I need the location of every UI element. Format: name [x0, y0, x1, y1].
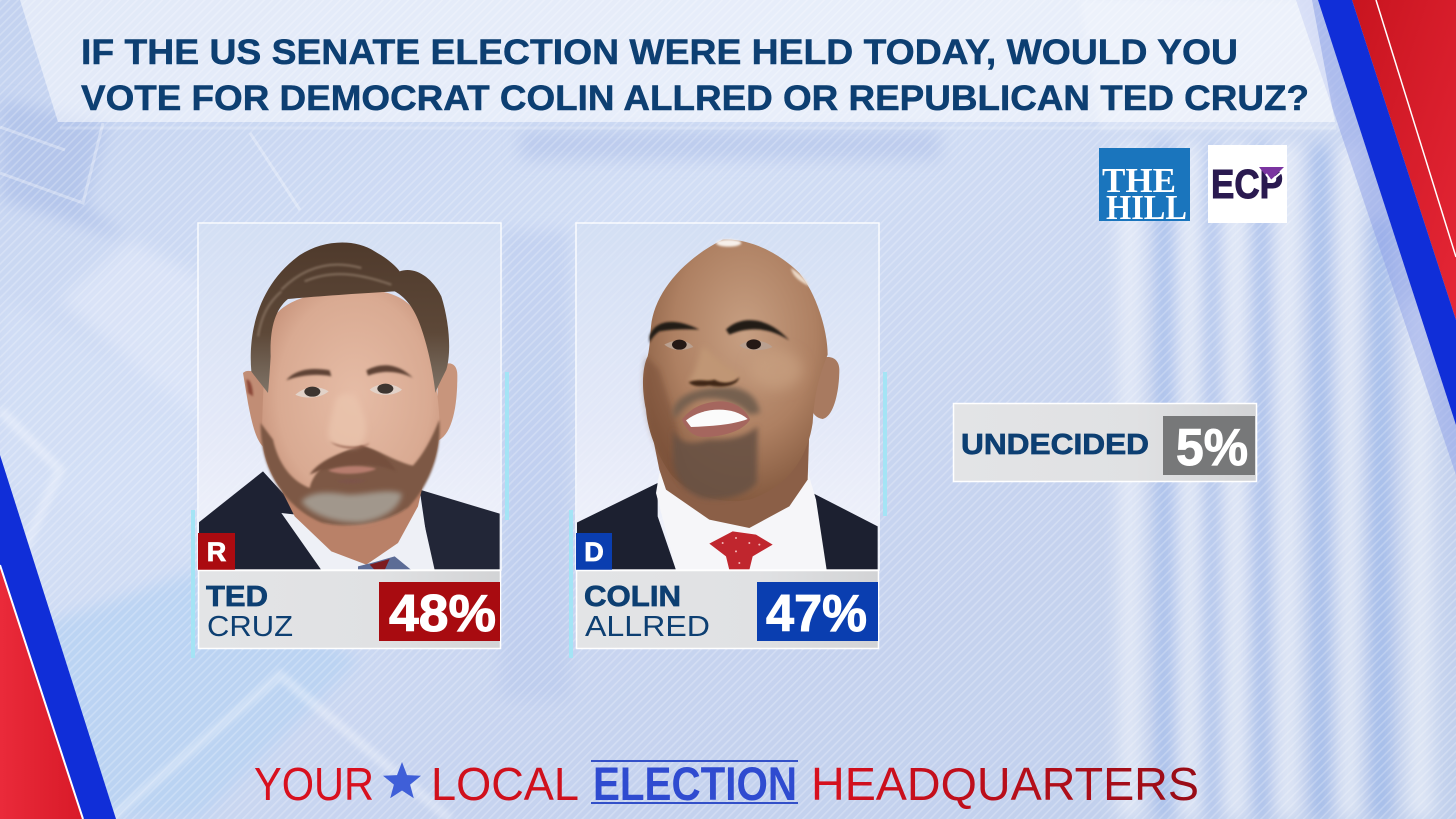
logo: ECP: ECP	[1211, 161, 1283, 207]
tagline: ELECTION	[593, 757, 797, 810]
tagline: LOCAL	[431, 758, 579, 810]
percentage 48%: 48%	[389, 585, 496, 643]
name strip: CRUZ	[207, 611, 293, 643]
tagline: YOUR	[254, 758, 374, 810]
name strip: TED	[206, 581, 268, 613]
tagline	[254, 757, 1199, 810]
bottom-left red and blue corner	[0, 455, 116, 819]
accent lines	[569, 372, 887, 658]
candidate card: Ted Cruz	[191, 223, 509, 658]
accent lines	[191, 372, 509, 658]
logo: ECP	[1208, 145, 1287, 223]
party badge D: D	[584, 537, 604, 567]
undecided label: UNDECIDED	[961, 429, 1149, 461]
party badge R: R	[207, 537, 226, 567]
top-right red and blue corner	[1296, 0, 1456, 475]
title panel	[20, 0, 1335, 122]
candidate card: Colin Allred	[569, 223, 887, 658]
portrait: Colin Allred	[576, 223, 879, 570]
percentage 5%: 5%	[1176, 419, 1248, 477]
title text: IF THE US SENATE ELECTION WERE HELD TODAY, WOULD YOU	[81, 33, 1238, 72]
title text	[81, 33, 1309, 118]
portrait: Ted Cruz	[198, 223, 501, 570]
logo: The Hill	[1099, 148, 1190, 227]
percentage 47%: 47%	[766, 585, 867, 643]
logo: The Hill: HILL	[1106, 188, 1187, 227]
name strip	[198, 570, 500, 648]
title text: VOTE FOR DEMOCRAT COLIN ALLRED OR REPUBLICAN TED CRUZ?	[81, 79, 1309, 118]
logo: The Hill: THE	[1102, 161, 1176, 200]
tagline: HEADQUARTERS	[811, 758, 1199, 810]
undecided card	[954, 404, 1256, 482]
name strip: ALLRED	[585, 611, 710, 643]
name strip: COLIN	[584, 581, 681, 613]
icon: star	[383, 762, 421, 798]
name strip	[576, 570, 878, 648]
party badge D	[576, 533, 612, 570]
party badge R	[198, 533, 235, 570]
